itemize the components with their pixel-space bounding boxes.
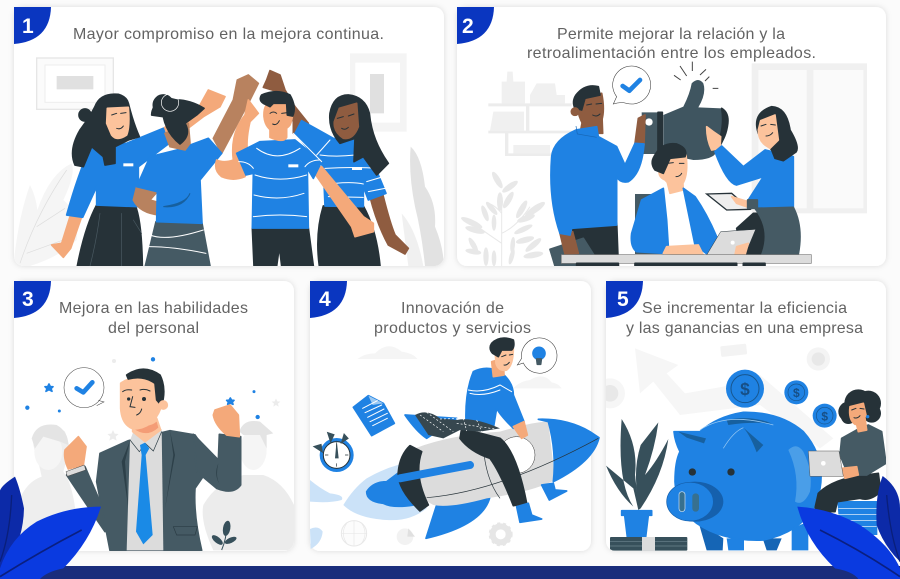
heading 3: del personal (108, 320, 199, 337)
background coworkers (18, 421, 294, 550)
coins: $ (740, 379, 750, 399)
document icon (353, 396, 394, 436)
background clouds and icons (310, 346, 562, 549)
bottom bar (0, 566, 900, 579)
table and laptop (561, 229, 811, 266)
woman pointing (707, 107, 800, 255)
heading 2: retroalimentación entre los empleados. (527, 45, 816, 62)
speech bubble with lightbulb (517, 338, 557, 373)
person: woman far right (263, 71, 408, 266)
panel 5: eficiencia (595, 281, 886, 551)
background plants (13, 147, 444, 266)
rocket (398, 415, 599, 538)
card 4 (310, 281, 591, 551)
heading 5 (626, 300, 863, 337)
businessman figure (65, 369, 241, 550)
decorative leaves left (0, 477, 101, 579)
panel 2: retroalimentacion (457, 7, 886, 266)
smoke (343, 462, 427, 520)
card 1 (14, 7, 444, 266)
speech bubble with check (64, 368, 104, 408)
person: woman left (52, 90, 225, 266)
heading 5: y las ganancias en una empresa (626, 320, 863, 337)
illustration: piggy bank (595, 344, 886, 551)
coins: $ (821, 409, 828, 423)
person: woman from behind (133, 75, 258, 266)
panel 1: compromiso (13, 7, 444, 266)
heading 3 (59, 300, 248, 337)
piggy bank (667, 412, 821, 550)
stars (26, 358, 280, 441)
background shelf and window (488, 63, 867, 213)
heading 2: Permite mejorar la relación y la (557, 26, 785, 43)
illustration: team high five (13, 53, 444, 266)
badge 4 (310, 281, 347, 318)
thumbs up sign (642, 62, 728, 160)
panel 4: innovacion (310, 281, 599, 551)
card 2 (457, 7, 886, 266)
illustration: businessman celebrating (18, 358, 294, 550)
potted plant and cash (606, 419, 687, 551)
coins: $ (793, 386, 800, 400)
person: man in striped shirt (216, 92, 373, 266)
badge 1 (14, 7, 51, 44)
coins (726, 370, 837, 428)
man riding (415, 338, 567, 522)
man seated at desk (631, 144, 717, 255)
heading 4 (374, 300, 531, 337)
card 3 (14, 281, 294, 551)
badge 5 (606, 281, 643, 318)
heading 5: Se incrementar la eficiencia (642, 300, 847, 317)
heading 4: Innovación de (401, 300, 504, 317)
woman with laptop (808, 389, 886, 535)
background arrow and coins (595, 344, 833, 448)
decorative leaves right (797, 476, 900, 579)
small plant (210, 520, 238, 550)
badge 4: 4 (319, 288, 331, 311)
heading 3: Mejora en las habilidades (59, 300, 248, 317)
illustration: team with thumbs up (460, 62, 867, 266)
background plant (460, 170, 547, 266)
badge 3 (14, 281, 51, 318)
badge 1: 1 (22, 15, 34, 38)
stopwatch (315, 433, 354, 472)
speech bubble with check (613, 66, 651, 104)
man standing (550, 86, 645, 266)
heading 1: Mayor compromiso en la mejora continua. (73, 26, 384, 43)
badge 2: 2 (462, 15, 474, 38)
wall frames (37, 53, 407, 132)
heading 2 (527, 26, 816, 62)
badge 3: 3 (22, 288, 34, 311)
badge 2 (457, 7, 494, 44)
heading 4: productos y servicios (374, 320, 531, 337)
illustration: man on rocket (310, 338, 599, 549)
card 5 (606, 281, 886, 551)
badge 5: 5 (617, 288, 629, 311)
panel 3: habilidades (14, 281, 294, 551)
